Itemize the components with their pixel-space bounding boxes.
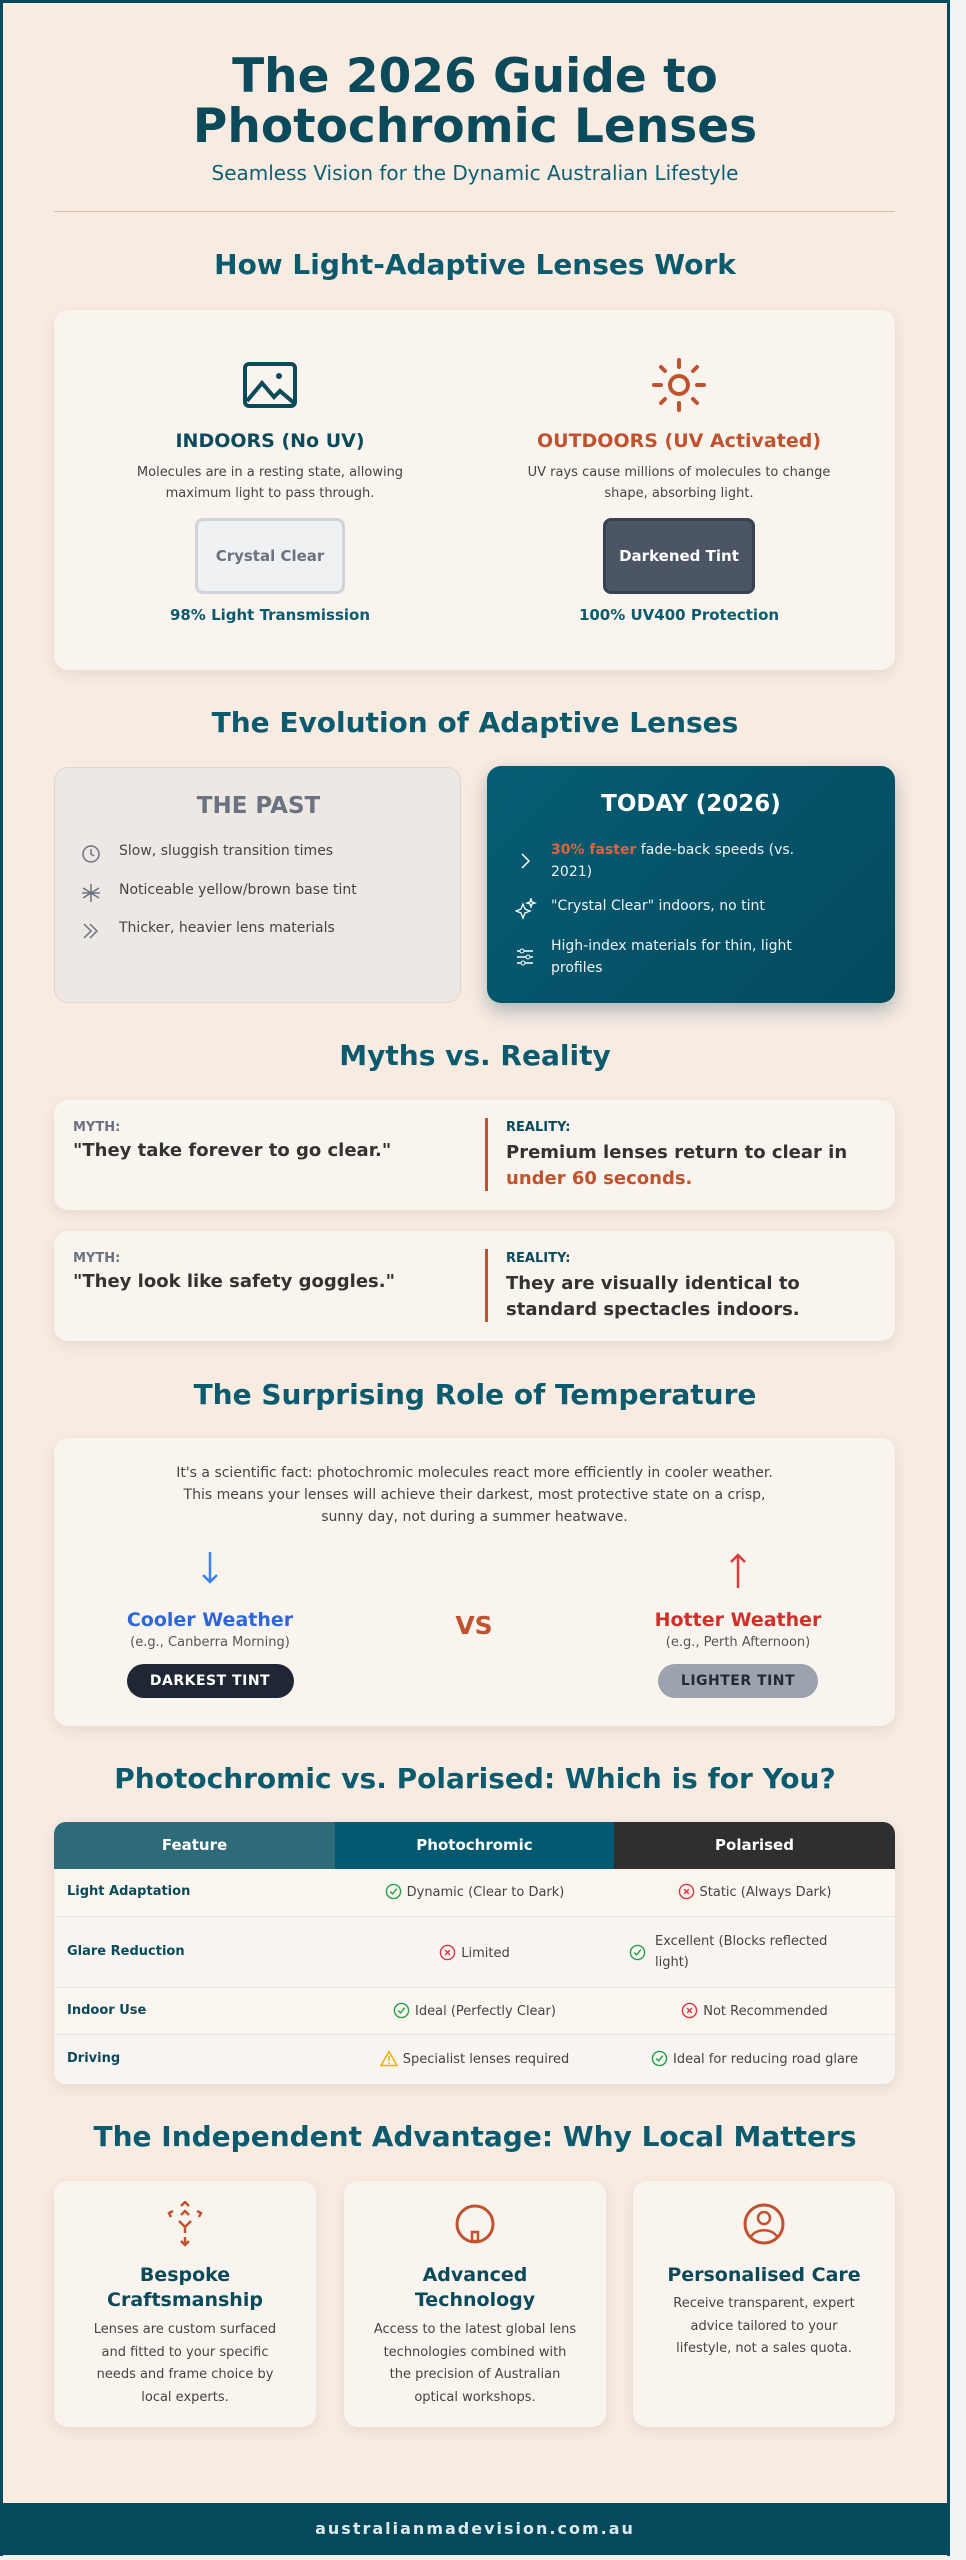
table header — [54, 1822, 895, 1869]
row: driving: Driving — [67, 2051, 120, 2066]
row: driving — [54, 2035, 895, 2084]
row: glare: Glare Reduction — [67, 1944, 185, 1959]
heading: advantage: The Independent Advantage: Why Local Matters — [94, 2120, 856, 2153]
arrow: up — [730, 1553, 746, 1588]
icon: image — [243, 362, 297, 408]
panel: myth 2: MYTH: — [73, 1251, 120, 1266]
icon: user — [744, 2204, 784, 2244]
panel: care: Receive transparent, expert advice tailored to your lifestyle, not a sales quota. — [673, 2296, 855, 2356]
indoors column — [137, 362, 403, 624]
panel: myth 1: REALITY: — [506, 1120, 570, 1135]
panel: care: Personalised Care — [667, 2264, 861, 2286]
badge: crystal clear — [195, 518, 345, 594]
panel: bespoke: Craftsmanship — [107, 2289, 263, 2311]
icon: sun — [652, 358, 706, 412]
arrow: down — [202, 1552, 218, 1584]
item: tint — [82, 882, 357, 902]
panel: the past: THE PAST — [197, 793, 320, 819]
outdoors column — [528, 358, 830, 624]
panel: temperature: sunny day, not during a summer heatwave. — [321, 1509, 628, 1525]
row: indoor — [54, 1988, 895, 2035]
panel: myth 2: They are visually identical to standard spectacles indoors. — [506, 1273, 800, 1320]
row: driving: Specialist lenses required — [403, 2052, 569, 2067]
subtitle: Seamless Vision for the Dynamic Australian Lifestyle — [212, 161, 738, 185]
cooler weather: Cooler Weather — [127, 1609, 293, 1631]
outdoors column: 100% UV400 Protection — [579, 606, 779, 624]
panel: technology: technologies combined with — [384, 2344, 566, 2360]
outdoors column: UV rays cause millions of molecules to change shape, absorbing light. — [528, 465, 830, 501]
row: light adaptation: Dynamic (Clear to Dark) — [407, 1885, 564, 1900]
table header: Photochromic — [416, 1836, 533, 1854]
title — [193, 49, 757, 154]
panel: technology: optical workshops. — [414, 2390, 536, 2404]
panel: myth 1: MYTH: — [73, 1120, 120, 1135]
panel: myth 1: Premium lenses return to clear in under 60 seconds. — [506, 1142, 847, 1189]
item: slow — [82, 843, 333, 863]
panel: today — [487, 766, 895, 1003]
cooler weather: DARKEST TINT — [150, 1673, 270, 1689]
heading: temperature: The Surprising Role of Temperature — [194, 1378, 756, 1411]
panel: technology: the precision of Australian — [390, 2367, 560, 2382]
icon: move — [167, 2201, 203, 2247]
item: high index: High-index materials for thin, light profiles — [551, 938, 792, 976]
panel: myth 2: "They look like safety goggles." — [73, 1271, 395, 1292]
table: comparison — [54, 1822, 895, 2084]
row: glare: Limited — [461, 1946, 510, 1961]
hotter weather: LIGHTER TINT — [681, 1673, 795, 1689]
badge: darkened tint — [603, 518, 755, 594]
cooler weather: (e.g., Canberra Morning) — [130, 1635, 290, 1650]
item: crystal clear: "Crystal Clear" indoors, no tint — [551, 898, 765, 914]
icon: lens — [456, 2204, 494, 2244]
vs: VS — [455, 1611, 493, 1640]
panel: technology — [344, 2181, 606, 2427]
cooler weather — [127, 1552, 294, 1698]
title: The 2026 Guide to — [232, 49, 718, 104]
item: thick: Thicker, heavier lens materials — [119, 920, 335, 936]
outdoors column: OUTDOORS (UV Activated) — [537, 430, 821, 452]
indoors column: Molecules are in a resting state, allowing maximum light to pass through. — [137, 465, 403, 501]
row: glare: Excellent (Blocks reflected light) — [655, 1934, 827, 1970]
item: slow: Slow, sluggish transition times — [119, 843, 333, 859]
panel: myth 2: REALITY: — [506, 1251, 570, 1266]
item: tint: Noticeable yellow/brown base tint — [119, 882, 357, 898]
row: indoor: Ideal (Perfectly Clear) — [415, 2004, 556, 2019]
heading: myths: Myths vs. Reality — [339, 1039, 611, 1072]
hotter weather — [655, 1553, 822, 1698]
title: Photochromic Lenses — [193, 99, 757, 154]
footer — [0, 2503, 950, 2555]
hotter weather: Hotter Weather — [655, 1609, 821, 1631]
panel: myth 2 — [54, 1231, 895, 1341]
table header: Feature — [162, 1836, 227, 1854]
panel: temperature: This means your lenses will achieve their darkest, most protective state on a crisp, — [184, 1487, 765, 1503]
row: light adaptation: Static (Always Dark) — [700, 1885, 832, 1900]
badge: crystal clear: Crystal Clear — [216, 547, 324, 565]
panel: temperature: It's a scientific fact: photochromic molecules react more efficiently in cooler weather. — [176, 1465, 773, 1481]
panel: bespoke — [54, 2181, 316, 2427]
heading: how it works: How Light-Adaptive Lenses Work — [214, 248, 736, 281]
panel: technology: Access to the latest global lens — [374, 2322, 576, 2337]
panel: today: TODAY (2026) — [601, 791, 781, 817]
panel: myth 1: "They take forever to go clear." — [73, 1140, 391, 1161]
heading: evolution: The Evolution of Adaptive Lenses — [212, 706, 738, 739]
panel: technology: Technology — [415, 2289, 535, 2311]
indoors column: INDOORS (No UV) — [175, 430, 365, 452]
item: faster: 30% faster fade-back speeds (vs. 2021) — [551, 842, 794, 880]
row: indoor: Not Recommended — [703, 2004, 828, 2019]
item: crystal clear — [515, 898, 765, 920]
panel: bespoke: Bespoke — [140, 2264, 230, 2286]
panel: care — [633, 2181, 895, 2427]
panel: myth 1 — [54, 1100, 895, 1210]
row: driving: Ideal for reducing road glare — [673, 2052, 858, 2067]
panel: temperature — [54, 1438, 895, 1726]
table header: Polarised — [715, 1836, 794, 1854]
panel: technology: Advanced — [423, 2264, 527, 2286]
panel: how lenses work — [54, 310, 895, 670]
badge: darkened tint: Darkened Tint — [619, 547, 739, 565]
hotter weather: (e.g., Perth Afternoon) — [666, 1635, 810, 1650]
row: light adaptation — [54, 1869, 895, 1917]
row: indoor: Indoor Use — [67, 2003, 146, 2018]
panel: the past — [54, 767, 461, 1003]
panel: bespoke: Lenses are custom surfaced and fitted to your specific needs and frame choice by local experts. — [94, 2322, 276, 2404]
footer: australianmadevision.com.au — [315, 2519, 635, 2538]
heading: comparison: Photochromic vs. Polarised: Which is for You? — [114, 1762, 836, 1795]
row: light adaptation: Light Adaptation — [67, 1884, 190, 1899]
indoors column: 98% Light Transmission — [170, 606, 370, 624]
row: glare — [54, 1917, 895, 1988]
